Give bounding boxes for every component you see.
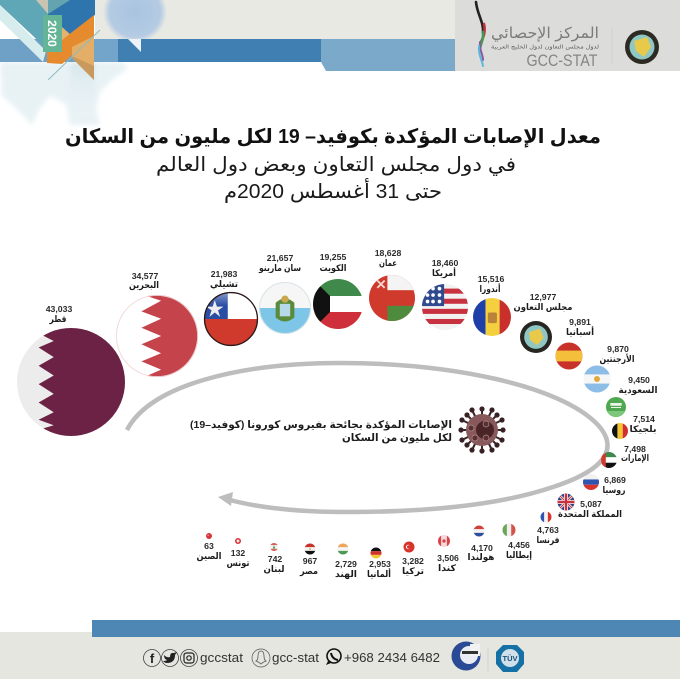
item: San Marino: سان مارينو bbox=[258, 263, 301, 274]
item: Saudi Arabia: السعودية bbox=[618, 385, 658, 396]
faint globe bbox=[103, 0, 167, 43]
item: Lebanon: 742 bbox=[268, 554, 282, 564]
item: China: 63 bbox=[204, 541, 214, 551]
item: Tunisia: تونس bbox=[226, 558, 250, 569]
icon: instagram bbox=[180, 650, 198, 666]
item: Canada bbox=[437, 535, 459, 573]
item: Egypt: 967 bbox=[303, 556, 317, 566]
decorative ribbons bbox=[0, 0, 100, 80]
item: Argentina: 9,870 bbox=[607, 344, 629, 354]
item: Saudi Arabia bbox=[606, 375, 658, 417]
item: United Kingdom: 5,087 bbox=[580, 499, 602, 509]
item: Chile bbox=[204, 269, 258, 346]
item: Belgium: 7,514 bbox=[633, 414, 655, 424]
item: Bahrain bbox=[116, 271, 198, 377]
curved arrow bbox=[127, 363, 608, 512]
logo ribbon bbox=[476, 2, 485, 66]
item: Netherlands: 4,170 bbox=[471, 543, 493, 553]
item: Kuwait: 19,255 bbox=[320, 252, 346, 262]
year tag: 2020 bbox=[45, 20, 59, 47]
item: France: 4,763 bbox=[537, 525, 559, 535]
item: United Kingdom bbox=[558, 494, 622, 519]
GCC-STAT logo panel bbox=[455, 0, 680, 71]
logo Arabic name: المركز الإحصائي bbox=[491, 25, 599, 43]
item: France: فرنسا bbox=[536, 535, 560, 546]
certification badge: TUV bbox=[496, 645, 524, 672]
item: Belgium: بلجيكا bbox=[630, 424, 656, 434]
legend text: الإصابات المؤكدة بجائحة بفيروس كورونا (كوفيد–19) bbox=[190, 419, 452, 431]
faint world map bbox=[0, 62, 128, 125]
footer blue band bbox=[92, 620, 680, 637]
item: Turkey: 3,282 bbox=[402, 556, 424, 566]
item: UAE: الإمارات bbox=[621, 453, 649, 464]
item: Spain bbox=[556, 317, 594, 370]
item: GCC average bbox=[514, 292, 572, 353]
item: Qatar: قطر bbox=[49, 314, 67, 325]
item: GCC average: 12,977 bbox=[530, 292, 556, 302]
item: Spain: أسبانيا bbox=[566, 326, 594, 337]
item: Andorra bbox=[473, 274, 511, 336]
item: Tunisia: 132 bbox=[231, 548, 245, 558]
item: Kuwait: الكويت bbox=[320, 263, 346, 274]
item: Italy bbox=[502, 524, 532, 560]
item: Germany: 2,953 bbox=[369, 559, 391, 569]
icon: whatsapp bbox=[326, 649, 341, 665]
item: Argentina bbox=[584, 344, 634, 392]
title line 1: معدل الإصابات المؤكدة بكوفيد– 19 لكل مليون من السكان bbox=[65, 126, 601, 148]
icon: coronavirus bbox=[459, 407, 505, 453]
item: Canada: 3,506 bbox=[437, 553, 459, 563]
item: San Marino bbox=[258, 253, 311, 334]
icon: snapchat bbox=[252, 649, 270, 667]
item: Egypt: مصر bbox=[299, 566, 318, 577]
item: UAE: 7,498 bbox=[624, 444, 646, 454]
item: Spain: 9,891 bbox=[569, 317, 591, 327]
item: Argentina: الأرجنتين bbox=[600, 353, 634, 365]
item: Bahrain: البحرين bbox=[129, 280, 159, 291]
item: Saudi Arabia: 9,450 bbox=[628, 375, 650, 385]
item: Russia: روسيا bbox=[602, 485, 626, 496]
title bbox=[65, 126, 601, 203]
item: India: 2,729 bbox=[335, 559, 357, 569]
item: Tunisia bbox=[226, 538, 250, 569]
title line 3: حتى 31 أغسطس 2020م bbox=[224, 178, 442, 203]
legend text bbox=[190, 419, 452, 444]
item: San Marino: 21,657 bbox=[267, 253, 293, 263]
item: Italy: إيطاليا bbox=[506, 550, 532, 560]
item: United Kingdom: المملكة المتحدة bbox=[558, 509, 622, 519]
item: Netherlands bbox=[468, 526, 494, 563]
icon: facebook bbox=[144, 650, 160, 666]
item: Russia bbox=[583, 474, 626, 496]
item: China bbox=[196, 533, 222, 562]
phone number: +968 2434 6482 bbox=[344, 650, 440, 665]
item: Netherlands: هولندا bbox=[468, 552, 494, 563]
item: Chile: تشيلي bbox=[210, 279, 238, 289]
icon: twitter bbox=[162, 650, 178, 666]
item: Qatar: 43,033 bbox=[46, 304, 72, 314]
logo GCC-STAT wordmark: GCC-STAT bbox=[526, 51, 598, 70]
item: Andorra: أندورا bbox=[480, 283, 500, 295]
item: Russia: 6,869 bbox=[604, 475, 626, 485]
item: GCC average: مجلس التعاون bbox=[514, 302, 572, 313]
item: Lebanon bbox=[264, 543, 284, 574]
item: USA bbox=[422, 258, 468, 330]
item: Qatar bbox=[17, 304, 125, 436]
item: USA: 18,460 bbox=[432, 258, 458, 268]
item: Andorra: 15,516 bbox=[478, 274, 504, 284]
item: France bbox=[536, 512, 560, 546]
item: Oman: 18,628 bbox=[375, 248, 401, 258]
item: Kuwait bbox=[313, 252, 363, 329]
item: Turkey bbox=[402, 542, 424, 577]
item: UAE bbox=[601, 444, 649, 468]
item: Turkey: تركيا bbox=[402, 566, 424, 577]
item: Lebanon: لبنان bbox=[264, 564, 284, 574]
item: Oman: عمان bbox=[379, 258, 397, 268]
certification badge: TUV: TÜV bbox=[502, 654, 518, 663]
handle: gccstat: gccstat bbox=[200, 650, 243, 665]
icon: facebook: f bbox=[150, 651, 155, 666]
title line 2: في دول مجلس التعاون وبعض دول العالم bbox=[156, 154, 516, 177]
header banner bbox=[0, 0, 680, 125]
legend text: لكل مليون من السكان bbox=[342, 432, 452, 444]
item: Germany bbox=[367, 548, 391, 579]
year tag bbox=[43, 15, 62, 52]
item: Germany: ألمانيا bbox=[367, 568, 391, 579]
item: Oman bbox=[369, 248, 415, 321]
handle: gcc-stat: gcc-stat bbox=[272, 650, 319, 665]
item: India: الهند bbox=[335, 569, 357, 580]
item: Belgium bbox=[612, 414, 656, 439]
item: USA: أمريكا bbox=[432, 267, 456, 279]
footer bbox=[0, 620, 680, 679]
item: China: الصين bbox=[196, 551, 222, 562]
GCC emblem bbox=[625, 30, 659, 64]
item: Canada: كندا bbox=[438, 563, 457, 573]
logo Arabic subtitle: لدول مجلس التعاون لدول الخليج العربية bbox=[491, 44, 599, 50]
item: Bahrain: 34,577 bbox=[132, 271, 158, 281]
item: India bbox=[335, 544, 357, 580]
certification badge: ISO bbox=[452, 642, 480, 670]
item: Chile: 21,983 bbox=[211, 269, 237, 279]
header blue band bbox=[0, 39, 455, 71]
item: Italy: 4,456 bbox=[508, 540, 530, 550]
item: Egypt bbox=[299, 544, 318, 577]
